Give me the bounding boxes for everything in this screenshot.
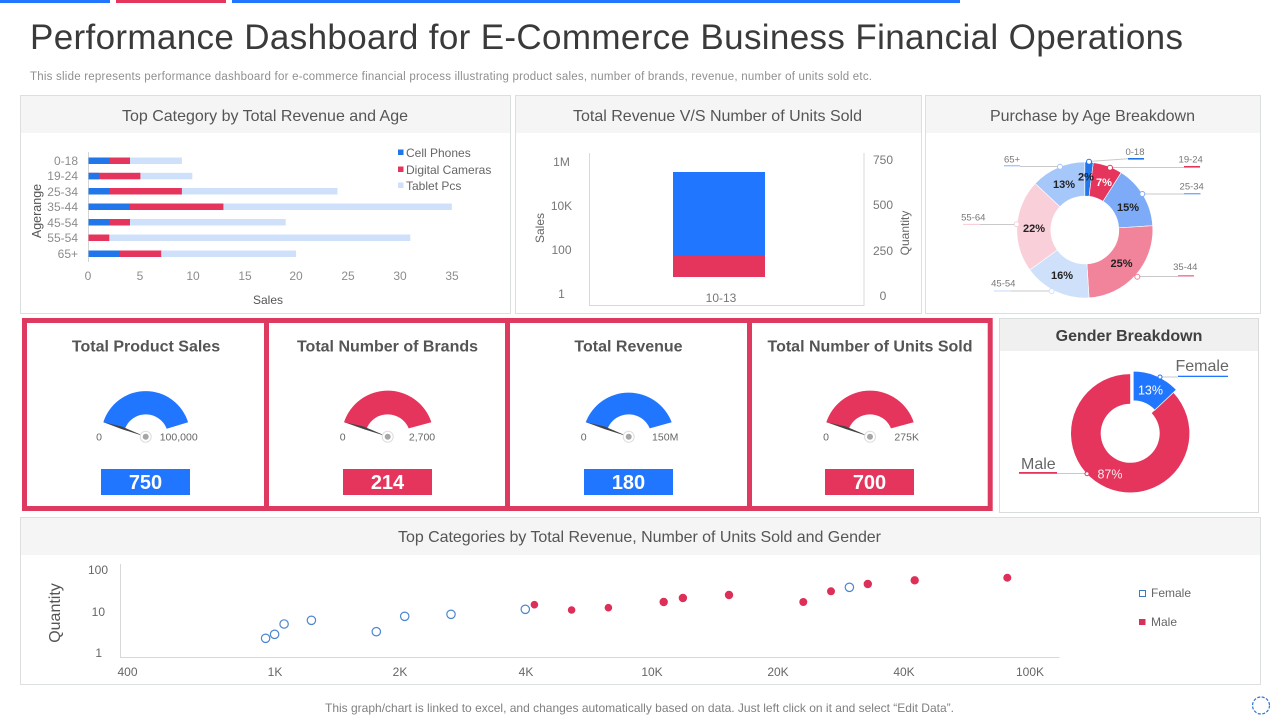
gauge: units sold xyxy=(823,391,919,444)
column chart: 10K xyxy=(551,199,572,213)
column chart: 1M xyxy=(553,155,570,169)
panel: revenue vs units sold xyxy=(516,96,922,314)
value box: 214 xyxy=(343,469,432,495)
column chart: 750 xyxy=(873,153,893,167)
scatter chart: 100 xyxy=(88,563,108,577)
gauge: revenue xyxy=(581,393,678,444)
callout: female: Female xyxy=(1176,358,1229,375)
value box: 750: 750 xyxy=(129,472,162,494)
donut chart: age: 16% xyxy=(1051,270,1073,282)
callout: male: Male xyxy=(1021,456,1056,473)
KPI: total number of units sold: Total Number of Units Sold xyxy=(767,338,973,356)
KPI: total product sales: Total Product Sales xyxy=(72,338,220,356)
donut chart: age xyxy=(1017,162,1153,298)
legend: gender: Male xyxy=(1151,615,1177,629)
panel: purchase by age breakdown xyxy=(926,96,1260,314)
stacked bar chart: 19-24 xyxy=(47,169,78,183)
gauge: units sold: 0 xyxy=(823,432,829,444)
panel: top category by revenue and age xyxy=(20,96,510,314)
gauge: units sold: 275K xyxy=(894,432,919,444)
stacked bar chart: 55-54 xyxy=(47,231,78,245)
heading: top categories: Top Categories by Total Revenue, Number of Units Sold and Gender xyxy=(398,529,882,546)
KPI: total number of brands: Total Number of Brands xyxy=(297,338,478,356)
top accent bars xyxy=(0,0,960,3)
stacked bar chart: 65+ xyxy=(58,247,78,261)
callouts: age labels: 0-18 xyxy=(1125,147,1145,158)
value box: 214: 214 xyxy=(371,472,405,494)
legend: categories: Tablet Pcs xyxy=(406,179,461,193)
panel: top categories scatter xyxy=(20,518,1260,684)
donut chart: age: 13% xyxy=(1053,179,1075,191)
callouts: age labels: 45-54 xyxy=(991,278,1015,290)
callout: female xyxy=(1158,358,1229,379)
KPI: total number of brands xyxy=(297,338,478,495)
stacked bar chart: Agerange xyxy=(30,184,44,238)
stacked bar chart: 0 xyxy=(85,269,92,283)
donut chart: gender xyxy=(1071,371,1189,492)
stacked bar chart xyxy=(30,152,459,307)
callouts: age labels: 35-44 xyxy=(1173,262,1197,273)
scatter chart: 2K xyxy=(393,665,407,679)
heading: top category: Top Category by Total Revenue and Age xyxy=(122,108,408,125)
stacked bar chart: 35-44 xyxy=(47,200,78,214)
KPI: total revenue xyxy=(574,338,683,495)
scatter chart: 1K xyxy=(268,665,282,679)
donut chart: age: 15% xyxy=(1117,202,1139,214)
KPI: total number of units sold xyxy=(767,338,973,495)
KPI: total revenue: Total Revenue xyxy=(574,338,683,356)
column chart xyxy=(533,153,912,306)
gauge: brands xyxy=(340,391,435,444)
gauge: product sales: 0 xyxy=(96,432,102,444)
column chart: 100 xyxy=(551,243,572,257)
gauge: revenue: 150M xyxy=(652,432,678,444)
gauge: brands: 0 xyxy=(340,432,346,444)
value box: 180: 180 xyxy=(612,472,645,494)
scatter chart xyxy=(47,563,1060,679)
footer note: This graph/chart is linked to excel, and changes automatically based on data. Just left click on it and select “Edit Data”. xyxy=(325,701,954,715)
scatter chart: 40K xyxy=(893,665,915,679)
donut chart: age: 25% xyxy=(1110,258,1133,270)
heading: revenue vs units: Total Revenue V/S Number of Units Sold xyxy=(573,108,862,125)
scatter chart: 400 xyxy=(117,665,138,679)
stacked bar chart: 25-34 xyxy=(47,185,78,199)
column chart: 250 xyxy=(873,244,893,258)
gauge: product sales: 100,000 xyxy=(160,432,198,444)
KPI frame xyxy=(24,320,990,508)
legend: gender xyxy=(1139,586,1191,629)
column chart: 0 xyxy=(880,289,887,303)
callouts: age labels: 19-24 xyxy=(1179,154,1203,166)
legend: gender: Female xyxy=(1151,586,1191,600)
donut chart: age: 22% xyxy=(1023,223,1045,235)
callout: male xyxy=(1019,456,1089,476)
scatter chart: Quantity xyxy=(47,583,64,643)
value box: 700 xyxy=(825,469,914,495)
legend: categories xyxy=(398,146,491,193)
donut chart: age: 7% xyxy=(1096,177,1112,189)
callouts: age labels: 65+ xyxy=(1004,154,1021,166)
stacked bar chart: 25 xyxy=(341,269,355,283)
value box: 750 xyxy=(101,469,190,495)
donut chart: age: 2% xyxy=(1078,172,1094,184)
KPI: total product sales xyxy=(72,338,220,495)
column chart: Sales xyxy=(533,213,547,243)
scatter chart: 10K xyxy=(641,665,663,679)
legend: categories: Digital Cameras xyxy=(406,163,491,177)
stacked bar chart: 15 xyxy=(238,269,252,283)
scatter chart: 4K xyxy=(519,665,533,679)
column chart: 10-13 xyxy=(706,291,737,305)
stacked bar chart: 35 xyxy=(445,269,459,283)
donut chart: gender: 87% xyxy=(1097,468,1123,482)
stacked bar chart: 0-18 xyxy=(54,154,78,168)
donut chart: gender: 13% xyxy=(1138,384,1163,398)
column chart: 1 xyxy=(558,287,565,301)
stacked bar chart: Sales xyxy=(253,293,283,307)
stacked bar chart: 5 xyxy=(137,269,144,283)
subtitle: This slide represents performance dashboard for e-commerce financial process illustrating product sales, number of brands, revenue, number of units sold etc. xyxy=(30,71,872,83)
gauge: revenue: 0 xyxy=(581,432,587,444)
column chart: 500 xyxy=(873,198,893,212)
icon: dashed circle xyxy=(1252,697,1270,714)
column chart: Quantity xyxy=(898,211,912,255)
scatter chart: 1 xyxy=(95,646,102,660)
value box: 700: 700 xyxy=(853,472,886,494)
gauge: brands: 2,700 xyxy=(409,432,435,444)
scatter chart: 20K xyxy=(767,665,789,679)
panel: gender breakdown xyxy=(1000,318,1258,512)
title: Performance Dashboard for E-Commerce Business Financial Operations xyxy=(30,18,1183,57)
legend: categories: Cell Phones xyxy=(406,146,471,160)
stacked bar chart: 45-54 xyxy=(47,216,78,230)
stacked bar chart: 20 xyxy=(289,269,303,283)
stacked bar chart: 10 xyxy=(186,269,200,283)
heading: purchase by age: Purchase by Age Breakdown xyxy=(990,108,1195,125)
callouts: age labels xyxy=(961,147,1204,294)
callouts: age labels: 55-64 xyxy=(961,212,985,224)
scatter chart: 100K xyxy=(1016,665,1044,679)
scatter chart: 10 xyxy=(92,605,105,619)
gauge: product sales xyxy=(96,391,198,444)
callouts: age labels: 25-34 xyxy=(1180,182,1204,192)
value box: 180 xyxy=(584,469,673,495)
heading: gender breakdown: Gender Breakdown xyxy=(1056,328,1202,345)
stacked bar chart: 30 xyxy=(393,269,407,283)
